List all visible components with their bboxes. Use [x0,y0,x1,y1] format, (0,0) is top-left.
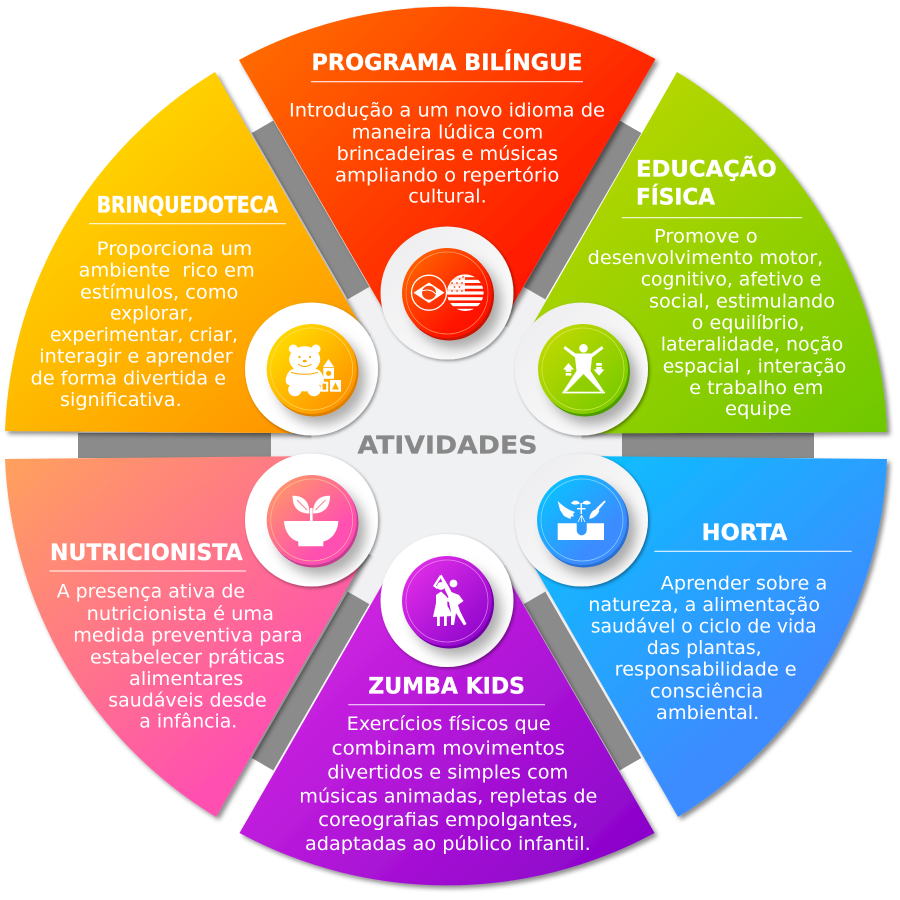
heading: programa bilingue: PROGRAMA BILÍNGUE [312,50,582,76]
center title: ATIVIDADES [358,430,538,460]
panel: brinquedoteca wedge [5,72,423,434]
central hub ring background [268,268,624,624]
text block: nutricionista: A presença ativa de [57,581,245,603]
text block: educacao fisica: espacial , interação [663,355,846,377]
text block: educacao fisica [588,226,846,420]
text block: educacao fisica: desenvolvimento motor, [588,247,823,269]
text block: horta: Aprender sobre a [661,572,827,594]
heading: brinquedoteca: BRINQUEDOTECA [97,194,278,219]
text block: nutricionista: nutricionista é uma [87,603,274,625]
text block: educacao fisica: o equilíbrio, [692,312,805,334]
heading: educacao fisica [622,157,802,218]
central hub covering wedge tips [312,293,582,600]
gray connector spokes [78,127,814,764]
text block: nutricionista: saudáveis desde [108,690,267,712]
icon badge: educacao fisica jumping figure [515,302,648,436]
text block: educacao fisica: e trabalho em [689,377,823,399]
text block: zumba kids: coreografias empolgantes, [318,809,578,831]
heading: zumba kids: ZUMBA KIDS [368,674,525,699]
text block: programa bilingue: ampliando o repertório [335,165,559,187]
text block: zumba kids [299,713,597,855]
text block: horta: responsabilidade e [615,659,797,681]
text block: nutricionista: estabelecer práticas [90,646,285,668]
text block: zumba kids: combinam movimentos [332,738,565,760]
text block: nutricionista: a infância. [139,711,237,733]
icon badge: brinquedoteca teddy bear [245,302,378,436]
text block: horta: saudável o ciclo de vida [591,615,817,637]
text block: brinquedoteca: de forma divertida e [31,368,226,390]
text block: brinquedoteca: estímulos, como [80,281,238,303]
text block: horta [588,572,827,724]
icon badge: horta planting [515,454,648,586]
text block: programa bilingue [289,100,605,208]
panel: programa bilingue wedge [239,7,656,419]
text block: zumba kids: músicas animadas, repletas de [299,785,597,807]
text block: horta: natureza, a alimentação [588,594,820,616]
text block: zumba kids: Exercícios físicos que [347,713,551,735]
text block: nutricionista: alimentares [129,668,243,690]
icon badge: programa bilingue flags [380,226,514,360]
text block: zumba kids: divertidos e simples com [327,761,568,783]
text block: brinquedoteca: explorar, [110,302,193,324]
heading: nutricionista: NUTRICIONISTA [50,541,243,566]
heading: educacao fisica: FÍSICA [636,185,715,211]
icon badge: nutricionista plant bowl [245,454,378,586]
panel: zumba kids wedge [240,472,654,885]
text block: programa bilingue: maneira lúdica com [352,121,543,143]
text block: educacao fisica: cognitivo, afetivo e [641,269,821,291]
text block: brinquedoteca: significativa. [60,389,182,411]
text block: educacao fisica: lateralidade, noção [661,334,843,356]
text block: brinquedoteca: Proporciona um [97,238,252,260]
text block: horta: ambiental. [656,702,759,724]
text block: brinquedoteca: experimentar, criar, [50,324,238,346]
text block: brinquedoteca [31,238,255,411]
text block: brinquedoteca: interagir e aprender [39,346,233,368]
text block: nutricionista [57,581,303,733]
text block: programa bilingue: Introdução a um novo idioma de [289,100,605,122]
text block: horta: consciência [650,680,763,702]
heading: educacao fisica: EDUCAÇÃO [636,157,777,183]
text block: educacao fisica: social, estimulando [649,290,835,312]
panel: educacao fisica wedge [470,72,887,434]
text block: educacao fisica: equipe [725,398,792,420]
text block: programa bilingue: brincadeiras e músicas [337,143,558,165]
text block: nutricionista: medida preventiva para [73,625,303,647]
icon badge: zumba kids dancers [380,534,514,667]
panel: nutricionista wedge [5,455,423,817]
text block: programa bilingue: cultural. [408,186,487,208]
panel: horta wedge [470,455,887,817]
text block: brinquedoteca: ambiente rico em [79,260,255,282]
heading: horta: HORTA [702,521,787,546]
text block: horta: das plantas, [647,637,762,659]
text block: educacao fisica: Promove o [654,226,758,248]
text block: zumba kids: adaptadas ao público infantil. [305,833,591,855]
